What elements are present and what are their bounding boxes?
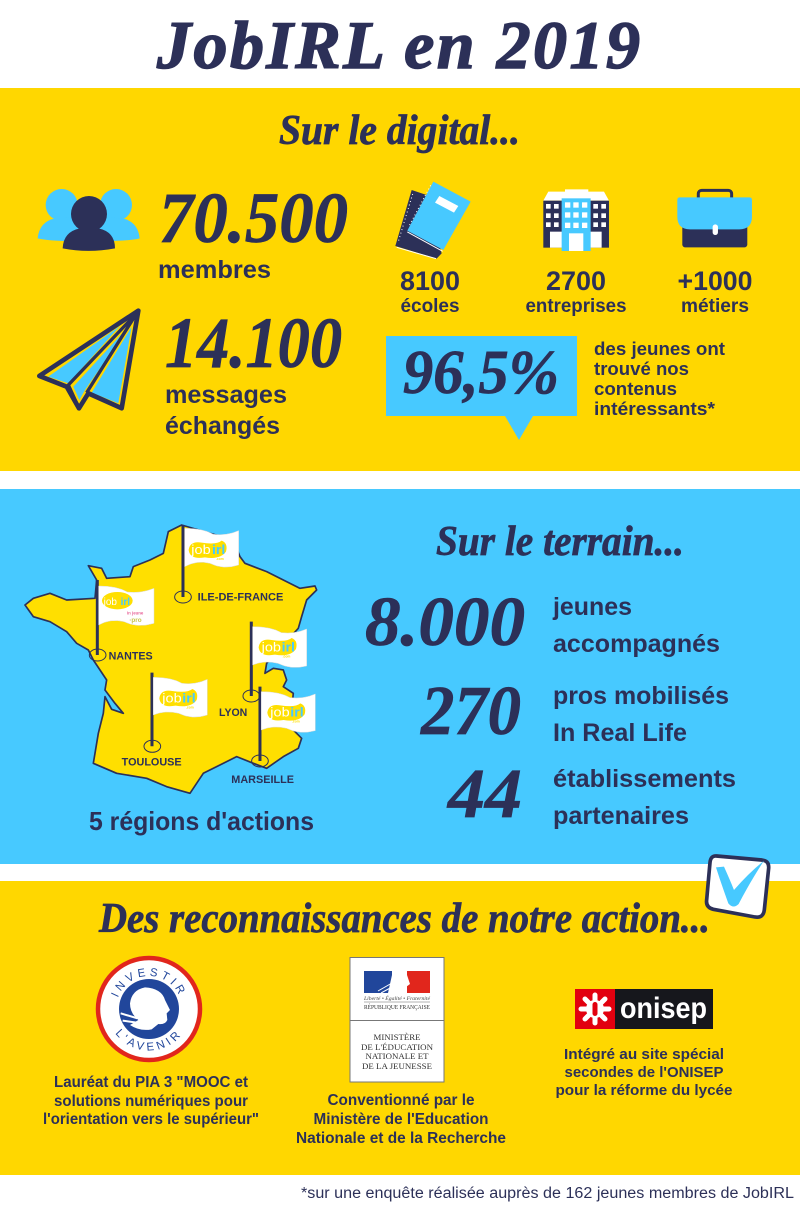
map labels: TOULOUSE — [122, 757, 182, 769]
logo: Onisep: onisep — [620, 992, 707, 1025]
stat: 44 établissements: établissements — [553, 765, 736, 793]
map labels: ILE-DE-FRANCE — [198, 592, 283, 604]
stat: +1000 métiers: +1000 — [678, 266, 752, 296]
logo: Ministère: RÉPUBLIQUE FRANÇAISE — [364, 1003, 430, 1011]
stat: 44 établissements — [446, 756, 736, 833]
stat: 70.500 membres: membres — [158, 256, 271, 284]
map labels: LYON — [219, 707, 247, 719]
flag: Nantes: irl — [121, 597, 130, 608]
flag: Toulouse — [153, 677, 207, 717]
text: Conventionné: Conventionné par le — [328, 1092, 475, 1109]
stat: 8.000 jeunes: 8.000 — [365, 584, 525, 661]
icon: briefcase — [677, 190, 752, 247]
stat: 8.000 jeunes — [365, 584, 720, 661]
text: Intégré: pour la réforme du lycée — [556, 1082, 732, 1099]
title: JobIRL en 2019 — [156, 7, 640, 83]
stat: 8.000 jeunes: jeunes — [552, 593, 632, 621]
stat: +1000 métiers: métiers — [681, 296, 749, 317]
map labels — [109, 592, 294, 786]
stat: 8100 écoles: 8100 — [400, 266, 460, 296]
text: Lauréat: Lauréat du PIA 3 "MOOC et — [54, 1074, 248, 1091]
heading: reconnaissances: Des reconnaissances de notre action... — [98, 896, 710, 942]
text: Intégré — [556, 1046, 732, 1099]
flag: Toulouse: irl — [182, 691, 196, 705]
panel: sur le digital — [0, 88, 800, 471]
text: Intégré: Intégré au site spécial — [564, 1046, 724, 1063]
stat: 70.500 membres: 70.500 — [159, 178, 348, 258]
text: Conventionné: Ministère de l'Education — [314, 1111, 488, 1128]
flag: Marseille: irl — [290, 706, 304, 720]
icon: paper plane — [39, 311, 138, 408]
logo: Ministère: Liberté • Égalité • Fraternité — [363, 994, 431, 1002]
flag: Ile-de-France — [185, 528, 239, 567]
text: Conventionné: Nationale et de la Recherche — [296, 1130, 506, 1147]
flag: Lyon: .com — [283, 654, 290, 658]
flag: Marseille — [261, 692, 315, 732]
flag: Toulouse: .com — [186, 705, 194, 709]
text: Lauréat — [43, 1074, 259, 1128]
flag: Nantes: job — [103, 597, 117, 608]
flag: Marseille: job — [269, 706, 290, 720]
heading: digital: Sur le digital... — [279, 108, 520, 154]
text: Conventionné — [296, 1092, 506, 1147]
flag: Nantes: ·pro — [129, 617, 142, 624]
logo: Ministère: NATIONALE ET — [366, 1052, 428, 1061]
logo: Ministère — [350, 958, 444, 1082]
logo: Onisep — [575, 989, 713, 1029]
flag: Lyon: irl — [282, 640, 295, 654]
text: Lauréat: l'orientation vers le supérieur" — [43, 1111, 259, 1128]
text: des jeunes — [594, 338, 725, 419]
callout: 96,5% — [386, 336, 577, 440]
stat: 2700 entreprises — [526, 266, 626, 317]
stat: 14.100 messages: échangés — [165, 412, 280, 440]
stat: 8.000 jeunes: accompagnés — [553, 630, 720, 658]
logo: Investir l'Avenir: L'AVENIR — [116, 1028, 180, 1051]
text: des jeunes: intéressants* — [594, 398, 716, 419]
flag: Ile-de-France: .com — [216, 557, 224, 561]
stat: 2700 entreprises: 2700 — [546, 266, 606, 296]
flag: Ile-de-France: irl — [212, 543, 225, 557]
map labels: MARSEILLE — [231, 774, 294, 786]
icon: building — [543, 189, 609, 251]
stat: 8100 écoles: écoles — [400, 296, 460, 317]
logo: Ministère: MINISTÈRE — [374, 1032, 420, 1042]
text: des jeunes: contenus — [594, 378, 677, 399]
logo: Ministère: DE L'ÉDUCATION — [361, 1042, 433, 1052]
flag: Lyon — [253, 627, 307, 667]
logo: Investir l'Avenir: INVESTIR — [111, 968, 184, 997]
flag: Nantes — [99, 586, 154, 625]
logo: Investir l'Avenir — [96, 956, 202, 1062]
icon: notebooks — [395, 182, 471, 259]
icon: people — [38, 189, 140, 251]
stat: 44 établissements: partenaires — [553, 802, 689, 830]
flag: Ile-de-France: job — [190, 543, 211, 557]
caption: 5 régions: 5 régions d'actions — [89, 806, 314, 836]
icon: checkbox — [707, 856, 769, 917]
footnote: *sur une enquête réalisée auprès de 162 jeunes membres de JobIRL — [301, 1185, 794, 1202]
flag: Toulouse: job — [161, 691, 182, 705]
stat: 270 pros: In Real Life — [553, 719, 687, 747]
stat: 14.100 messages: 14.100 — [165, 303, 342, 383]
stat: 2700 entreprises: entreprises — [526, 296, 626, 317]
stat: 270 pros: pros mobilisés — [553, 682, 729, 710]
stat: 270 pros: 270 — [420, 673, 521, 750]
logo: Ministère: DE LA JEUNESSE — [362, 1062, 432, 1071]
panel: sur le terrain — [0, 489, 800, 864]
flag: Marseille: .com — [292, 720, 300, 724]
text: des jeunes: des jeunes ont — [594, 338, 725, 359]
map of France — [25, 525, 317, 793]
text: des jeunes: trouvé nos — [594, 358, 689, 379]
heading: terrain: Sur le terrain... — [436, 519, 684, 565]
panel: reconnaissances — [0, 854, 800, 1175]
stat: +1000 métiers — [678, 266, 752, 317]
text: Lauréat: solutions numériques pour — [54, 1093, 248, 1110]
stat: 14.100 messages: messages — [165, 381, 287, 409]
stat: 14.100 messages — [165, 303, 342, 440]
text: Intégré: secondes de l'ONISEP — [564, 1064, 724, 1081]
map labels: NANTES — [109, 650, 153, 662]
flag: Nantes: in jeune — [127, 611, 144, 616]
stat: 44 établissements: 44 — [446, 756, 522, 833]
flag: Lyon: job — [260, 640, 281, 654]
callout: 96,5%: 96,5% — [403, 339, 559, 407]
stat: 270 pros — [420, 673, 729, 750]
stat: 8100 écoles — [400, 266, 460, 317]
